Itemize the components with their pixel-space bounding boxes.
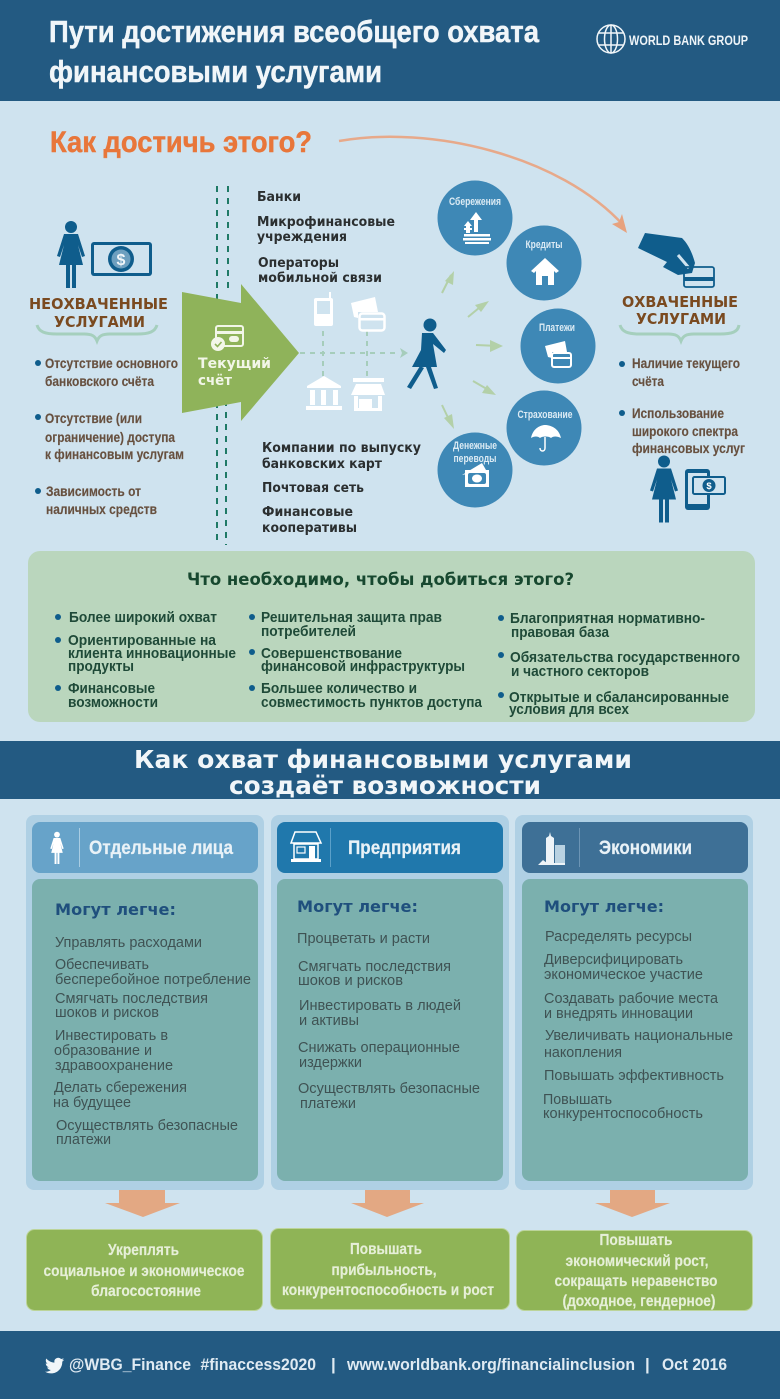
- column 1: возможности: [68, 694, 158, 711]
- column 1: [68, 609, 236, 711]
- list: providers top: мобильной связи: [258, 270, 382, 286]
- body: businesses: Могут легче:: [297, 897, 418, 916]
- icon: phone: [314, 292, 333, 326]
- heading: how to achieve: Как достичь этого?: [50, 126, 312, 159]
- body: economies: Могут легче:: [544, 897, 664, 916]
- panel: what is needed: [28, 551, 755, 722]
- icon: arrowhead to person: [400, 348, 408, 358]
- icon: umbrella: [531, 425, 561, 451]
- section band: how inclusion creates opportunity: Как охват финансовыми услугами: [134, 745, 632, 774]
- arrow: current account: [182, 284, 299, 421]
- column 2: совместимость пунктов доступа: [261, 694, 483, 711]
- column 3: Обязательства государственного: [510, 649, 740, 666]
- logo: World Bank Group: WORLD BANK GROUP: [629, 32, 748, 48]
- section band: how inclusion creates opportunity: [0, 741, 780, 800]
- body: individuals: Могут легче:: [55, 900, 176, 919]
- column 2: Решительная защита прав: [261, 609, 442, 626]
- column 1: Более широкий охват: [69, 609, 217, 626]
- section band: how inclusion creates opportunity: создаёт возможности: [229, 771, 541, 800]
- column 1: Финансовые: [68, 680, 155, 697]
- outcome: wellbeing: благосостояние: [91, 1283, 201, 1300]
- title: [49, 14, 540, 89]
- outcome: growth: Повышать: [600, 1232, 672, 1249]
- label: unserved: [29, 295, 168, 341]
- circle: insurance: [506, 390, 582, 466]
- column 3: Открытые и сбалансированные: [509, 689, 729, 706]
- list: providers bottom: кооперативы: [262, 520, 357, 536]
- column 2: Большее количество и: [261, 680, 417, 697]
- body: economies: Расределять ресурсы: [545, 929, 692, 945]
- body: businesses: Снижать операционные: [298, 1040, 460, 1056]
- list: providers bottom: [262, 440, 421, 536]
- list: providers top: учреждения: [257, 229, 347, 245]
- footer: [0, 1331, 780, 1399]
- title: финансовыми услугами: [49, 54, 382, 89]
- footer text: |: [645, 1355, 650, 1374]
- body: economies: Увеличивать национальные: [545, 1028, 733, 1044]
- column 1: Ориентированные на: [68, 632, 217, 649]
- list: providers top: Микрофинансовые: [257, 214, 395, 230]
- body: economies: [522, 879, 748, 1181]
- arrow: curved to served: [339, 137, 627, 233]
- icon: cards: [545, 341, 571, 367]
- body: individuals: на будущее: [53, 1095, 131, 1111]
- column 3: правовая база: [511, 624, 610, 641]
- label: unserved: НЕОХВАЧЕННЫЕ: [29, 295, 168, 313]
- body: economies: Повышать: [543, 1092, 612, 1108]
- panel: individuals: [26, 815, 264, 1190]
- header: economies: Экономики: [599, 838, 692, 859]
- outcome: profitability: [270, 1228, 510, 1310]
- column 1: продукты: [68, 658, 134, 675]
- icon: woman with banknote: [57, 221, 152, 288]
- dashed divider: [217, 186, 228, 545]
- body: businesses: и активы: [299, 1013, 359, 1029]
- list: providers bottom: Финансовые: [262, 504, 353, 520]
- list: served points: Наличие текущего: [632, 355, 740, 371]
- footer text: |: [331, 1355, 336, 1374]
- body: economies: и внедрять инновации: [544, 1006, 693, 1022]
- footer text: #finaccess2020: [200, 1355, 316, 1374]
- icon: house: [531, 258, 559, 285]
- outcome: profitability: Повышать: [350, 1241, 422, 1258]
- body: individuals: образование и: [54, 1043, 152, 1059]
- body: businesses: Смягчать последствия: [298, 959, 451, 975]
- arrow: current account: счёт: [198, 373, 233, 389]
- body: businesses: Процветать и расти: [297, 931, 430, 947]
- column 1: клиента инновационные: [68, 645, 236, 662]
- body: individuals: здравоохранение: [55, 1058, 173, 1074]
- bullets: [55, 614, 504, 698]
- footer text: @WBG_Finance: [69, 1355, 191, 1374]
- list: unserved points: наличных средств: [46, 501, 157, 517]
- circle: payments: Платежи: [539, 322, 575, 334]
- circle: remittances: переводы: [454, 453, 496, 465]
- header: businesses: Предприятия: [348, 838, 461, 859]
- circle: savings: Сбережения: [449, 196, 501, 208]
- outcome: growth: экономический рост,: [566, 1253, 708, 1270]
- body: businesses: Осуществлять безопасные: [298, 1081, 480, 1097]
- dashed connectors: [300, 331, 400, 377]
- list: providers top: Операторы: [258, 255, 339, 271]
- list: providers bottom: Почтовая сеть: [262, 480, 364, 496]
- outcome: wellbeing: социальное и экономическое: [44, 1263, 245, 1280]
- list: unserved points: ограничение) доступа: [45, 429, 175, 445]
- header: individuals: [32, 822, 258, 873]
- list: unserved points: банковского счёта: [45, 373, 154, 389]
- body: economies: накопления: [544, 1045, 622, 1061]
- list: unserved points: [35, 355, 184, 517]
- body: individuals: Инвестировать в: [55, 1028, 168, 1044]
- list: providers bottom: Компании по выпуску: [262, 440, 421, 456]
- body: individuals: бесперебойное потребление: [55, 972, 251, 988]
- title: Пути достижения всеобщего охвата: [49, 14, 540, 49]
- body: businesses: [277, 879, 503, 1181]
- outcome: wellbeing: Укреплять: [108, 1242, 179, 1259]
- body: individuals: шоков и рисков: [55, 1005, 159, 1021]
- icon: shop: [291, 832, 321, 862]
- column 2: Совершенствование: [261, 645, 402, 662]
- circle: insurance: Страхование: [518, 409, 572, 421]
- column 3: и частного секторов: [511, 663, 649, 680]
- icon: shop: [351, 378, 385, 411]
- list: unserved points: Отсутствие (или: [45, 410, 142, 426]
- body: individuals: Обеспечивать: [55, 957, 149, 973]
- footer text: [69, 1355, 727, 1374]
- column 2: [261, 609, 483, 711]
- body: individuals: Управлять расходами: [55, 935, 202, 951]
- arrows: green to services: [442, 271, 503, 429]
- icon: woman with tablet: $: [706, 481, 712, 492]
- icon: bank: [306, 376, 342, 410]
- body: businesses: Инвестировать в людей: [299, 998, 461, 1014]
- body: businesses: шоков и рисков: [298, 973, 403, 989]
- icon: cards: [351, 297, 384, 330]
- circle: payments: [520, 308, 596, 384]
- icon: city: [538, 832, 565, 865]
- column 2: финансовой инфраструктуры: [261, 658, 465, 675]
- outcome: growth: сокращать неравенство: [554, 1273, 718, 1290]
- icon: woman with tablet: [650, 456, 725, 522]
- outcome: profitability: конкурентоспособность и рост: [282, 1282, 494, 1299]
- list: served points: широкого спектра: [632, 423, 738, 439]
- icons: provider types: [306, 292, 385, 411]
- body: businesses: издержки: [299, 1055, 362, 1071]
- icon: woman with banknote: $: [117, 252, 126, 269]
- label: served: ОХВАЧЕННЫЕ: [622, 293, 738, 311]
- label: served: [620, 293, 739, 341]
- list: unserved points: Отсутствие основного: [45, 355, 178, 371]
- arrows: down to outcomes: [105, 1190, 670, 1217]
- circle: remittances: Денежные: [453, 440, 497, 452]
- list: served points: финансовых услуг: [632, 440, 745, 456]
- body: economies: экономическое участие: [544, 967, 703, 983]
- body: economies: Повышать эффективность: [544, 1068, 724, 1084]
- column 3: условия для всех: [509, 701, 630, 718]
- body: individuals: [32, 879, 258, 1181]
- icon: money growth: [463, 212, 491, 244]
- header: businesses: [277, 822, 503, 873]
- body: economies: Создавать рабочие места: [544, 991, 719, 1007]
- circle: loans: [506, 226, 582, 300]
- list: served points: [619, 355, 745, 456]
- arrow: current account: Текущий: [198, 356, 271, 372]
- list: unserved points: к финансовым услугам: [45, 446, 184, 462]
- heading: what is needed: Что необходимо, чтобы добиться этого?: [187, 570, 574, 589]
- body: economies: Диверсифицировать: [544, 952, 683, 968]
- circle: savings: [438, 180, 512, 256]
- circle: remittances: [438, 432, 512, 508]
- list: served points: Использование: [632, 405, 724, 421]
- panel: businesses: [271, 815, 509, 1190]
- outcome: growth: [516, 1230, 752, 1310]
- header: individuals: Отдельные лица: [89, 838, 233, 859]
- icon: account card: [211, 326, 243, 351]
- icon: twitter: [45, 1358, 64, 1373]
- list: served points: счёта: [632, 373, 664, 389]
- logo: World Bank Group: [597, 25, 748, 53]
- label: served: УСЛУГАМИ: [636, 310, 726, 328]
- body: individuals: платежи: [56, 1132, 111, 1148]
- body: individuals: Смягчать последствия: [55, 991, 208, 1007]
- list: providers top: Банки: [257, 189, 301, 205]
- header: economies: [522, 822, 748, 873]
- body: individuals: Делать сбережения: [54, 1080, 187, 1096]
- outcome: wellbeing: [26, 1230, 262, 1310]
- column 3: Благоприятная нормативно-: [510, 610, 705, 627]
- column 3: [509, 610, 740, 718]
- panel: economies: [515, 815, 753, 1190]
- icon: hand with card: [638, 233, 714, 287]
- circle: loans: Кредиты: [526, 239, 562, 251]
- body: businesses: платежи: [300, 1096, 356, 1112]
- list: providers top: [257, 189, 395, 286]
- column 2: потребителей: [261, 623, 356, 640]
- outcome: profitability: прибыльность,: [332, 1262, 436, 1279]
- footer text: www.worldbank.org/financialinclusion: [346, 1355, 635, 1374]
- icon: walking person: [407, 318, 446, 389]
- body: individuals: Осуществлять безопасные: [56, 1118, 238, 1134]
- outcome: growth: (доходное, гендерное): [562, 1293, 716, 1310]
- body: economies: конкурентоспособность: [543, 1106, 703, 1122]
- list: providers bottom: банковских карт: [262, 456, 382, 472]
- icon: banknote: [462, 463, 489, 487]
- label: unserved: УСЛУГАМИ: [54, 313, 145, 331]
- list: unserved points: Зависимость от: [46, 483, 141, 499]
- header band: [0, 0, 780, 101]
- icon: woman: [50, 832, 64, 864]
- footer text: Oct 2016: [662, 1355, 727, 1374]
